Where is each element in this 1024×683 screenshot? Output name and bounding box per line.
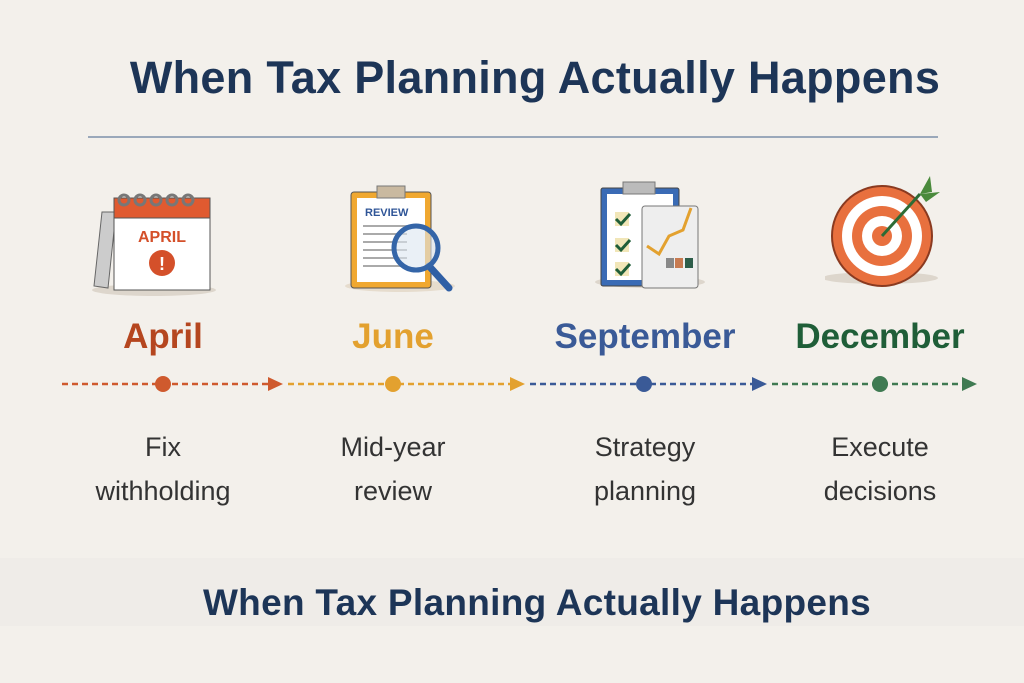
text: strategy planning: Strategy — [595, 432, 695, 462]
month: December: December — [795, 317, 965, 356]
text: fix withholding: Fix — [145, 432, 181, 462]
month: September: September — [555, 317, 735, 356]
text: execute decisions — [824, 432, 936, 506]
text: fix withholding: withholding — [95, 476, 231, 506]
text: mid-year review — [340, 432, 446, 506]
text: execute decisions: Execute — [831, 432, 929, 462]
timeline — [62, 376, 977, 392]
icon: calendar — [92, 194, 216, 296]
text: strategy planning: planning — [594, 476, 696, 506]
icon: target — [825, 176, 940, 287]
text: mid-year review: review — [354, 476, 432, 506]
icon: strategy clipboard — [595, 182, 705, 288]
title: When Tax Planning Actually Happens — [130, 52, 940, 103]
icon: review clipboard — [345, 186, 455, 292]
text: strategy planning — [594, 432, 696, 506]
footer title: When Tax Planning Actually Happens — [203, 582, 871, 623]
icon: calendar: APRIL — [138, 229, 186, 246]
text: fix withholding — [95, 432, 231, 506]
month: April: April — [123, 317, 203, 356]
icon: review clipboard: REVIEW — [365, 207, 409, 219]
text: execute decisions: decisions — [824, 476, 936, 506]
month: June: June — [352, 317, 434, 356]
footer band — [0, 558, 1024, 626]
text: mid-year review: Mid-year — [340, 432, 446, 462]
icon: calendar: ! — [159, 254, 165, 274]
